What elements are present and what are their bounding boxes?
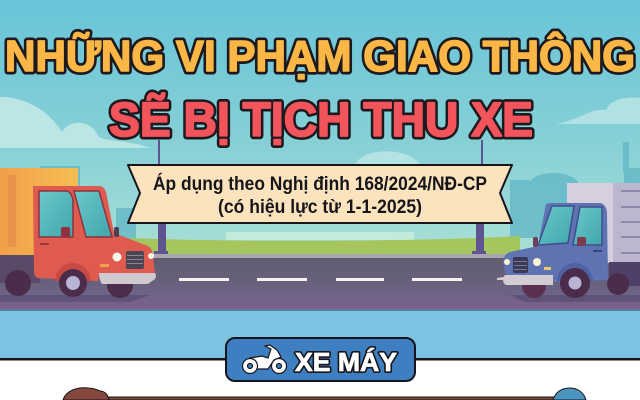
brown content bar xyxy=(105,397,555,400)
title line 2: SẼ BỊ TỊCH THU XE xyxy=(109,93,533,147)
badge: xe máy: XE MÁY xyxy=(295,347,397,377)
white content area xyxy=(0,359,640,400)
character head: blue helmet xyxy=(553,388,586,400)
badge: xe máy: XE MÁY xyxy=(295,347,397,377)
ribbon banner: (có hiệu lực từ 1-1-2025) xyxy=(218,197,422,218)
badge: xe máy xyxy=(226,338,415,381)
section divider line xyxy=(0,358,640,360)
grass strip xyxy=(130,236,520,256)
ribbon banner: Áp dụng theo Nghị định 168/2024/NĐ-CP xyxy=(153,173,487,195)
city skyline xyxy=(40,142,640,240)
pale building behind ribbon xyxy=(226,232,414,240)
cloud: left xyxy=(0,97,150,148)
ribbon banner xyxy=(128,165,512,223)
sky background xyxy=(0,0,640,258)
cloud: centre xyxy=(355,151,420,164)
truck: red, left xyxy=(0,168,156,302)
character head: brown hair xyxy=(63,388,109,400)
light blue band xyxy=(0,311,640,359)
road xyxy=(0,254,640,311)
cloud: right xyxy=(556,98,640,124)
icon: motorcycle xyxy=(242,345,286,374)
ribbon posts xyxy=(154,140,486,255)
truck: blue, right xyxy=(497,183,640,302)
title line 2: SẼ BỊ TỊCH THU XE xyxy=(109,93,533,147)
